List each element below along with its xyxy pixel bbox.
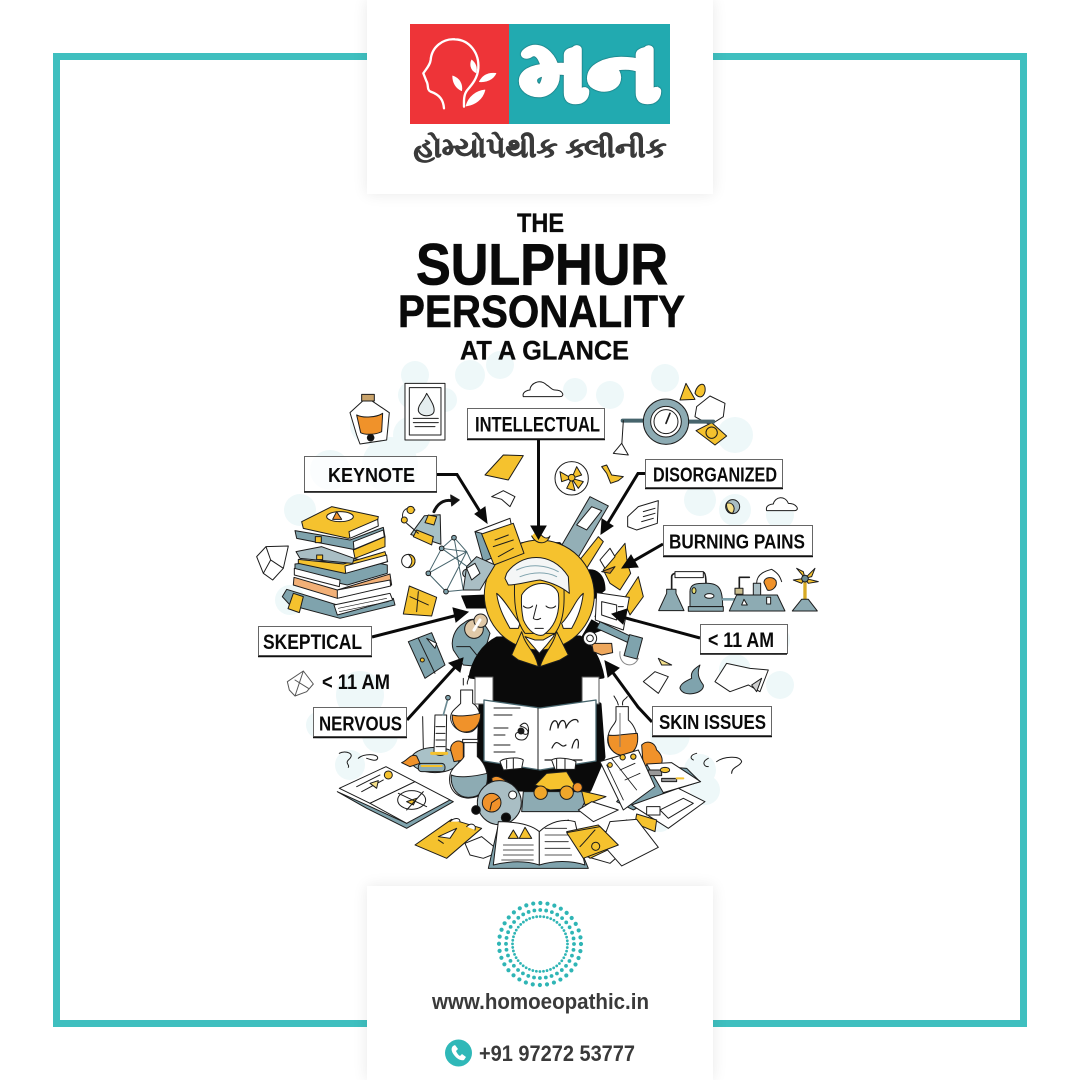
- icon: yellow chart note and sketch sheet: [567, 820, 640, 863]
- arrow: skeptical: [372, 608, 468, 637]
- icon: right wrench assembly: [583, 607, 643, 665]
- icon: yellow card: [485, 455, 523, 480]
- arrow: disorganized: [601, 474, 645, 534]
- icon: report sheet: [595, 593, 629, 630]
- label: intellectual: [467, 408, 605, 440]
- illustration: [257, 382, 818, 868]
- icon: phone: [445, 1040, 472, 1066]
- icon: flame shards: [600, 543, 643, 615]
- arrow: less than 11 am right: [612, 609, 700, 638]
- icon: dotted ring logo: [499, 903, 581, 985]
- icon: grey flask: [450, 739, 487, 798]
- label: burning pains: BURNING PAINS: [669, 532, 805, 554]
- label: skin issues: [652, 706, 772, 736]
- website: www.homoeopathic.in: [431, 989, 649, 1014]
- icon: cloud top: [523, 382, 563, 397]
- icon: yellow map note: [403, 586, 437, 616]
- icon: large open book bottom: [488, 820, 588, 868]
- icon: note paper: [628, 501, 658, 530]
- icon: beaker on stand: [402, 695, 463, 773]
- icon: crumpled paper small: [287, 671, 313, 696]
- arrow: intellectual: [531, 440, 546, 539]
- arrow: nervous: [407, 658, 463, 720]
- icon: open book with handwriting: [484, 700, 596, 770]
- icon: molecule lattice: [426, 535, 477, 594]
- label: less than 11 am left: < 11 AM: [322, 671, 390, 694]
- label: keynote: [304, 456, 437, 492]
- icon: lab equipment: [659, 568, 818, 611]
- icon: orange potion jar: [350, 394, 389, 444]
- arrow: skin issues: [605, 661, 652, 722]
- arrow: keynote: [436, 474, 487, 523]
- panel: logo backing: [367, 0, 713, 194]
- title: AT A GLANCE: [460, 336, 629, 366]
- phone number: +91 97272 53777: [479, 1041, 635, 1066]
- arrows: [372, 440, 700, 722]
- title: THE: [517, 208, 564, 238]
- label: skin issues: SKIN ISSUES: [659, 712, 766, 734]
- icon: ball: [402, 554, 415, 568]
- logo: [410, 24, 670, 163]
- label: skeptical: [258, 626, 372, 656]
- title: PERSONALITY: [398, 286, 685, 337]
- brand subtitle: હોમ્યોપેથીક ક્લીનીક: [414, 132, 666, 163]
- icon: cloud right: [766, 498, 797, 511]
- icon: head with leaves: [423, 39, 496, 108]
- label: keynote: KEYNOTE: [328, 465, 415, 487]
- icon: open book lower left: [337, 767, 453, 828]
- figure: torso: [470, 637, 604, 790]
- title: [398, 208, 685, 366]
- icon: yellow note bottom left: [415, 818, 500, 858]
- label: intellectual: INTELLECTUAL: [475, 414, 600, 436]
- icon: floating items right: [643, 658, 768, 694]
- icon: grey mechanical gear: [452, 614, 490, 667]
- background pale blue blobs: [275, 351, 794, 832]
- icon: phone device: [559, 497, 608, 568]
- icon: grey book left: [408, 633, 445, 678]
- icon: small globe ball: [726, 500, 740, 514]
- label: nervous: NERVOUS: [319, 714, 402, 736]
- icon: torn paper: [492, 491, 515, 507]
- figure: hands: [500, 758, 576, 770]
- icon: orange flask left: [451, 676, 481, 732]
- icon: yellow note on bottom sketch: [567, 827, 618, 858]
- icon: scribble left: [339, 752, 378, 767]
- figure: halo head and face: [462, 529, 607, 667]
- label: skeptical: SKEPTICAL: [263, 631, 362, 654]
- icon: yellow bone: [602, 465, 623, 483]
- panel: contact backing: [367, 886, 713, 1080]
- label: nervous: [313, 708, 407, 738]
- icon: scribble right: [691, 753, 742, 773]
- icon: fan disc: [555, 462, 588, 495]
- arrow: burning pains: [622, 544, 663, 568]
- label: disorganized: DISORGANIZED: [653, 464, 777, 486]
- icon: gauge instrument: [613, 383, 727, 455]
- contact block: [431, 903, 649, 1066]
- icon: flask and maps right: [578, 696, 705, 866]
- title: SULPHUR: [416, 232, 668, 298]
- icon: book stack: [282, 507, 395, 618]
- icon: crumpled paper left: [257, 546, 288, 580]
- brand name: મન: [520, 27, 660, 118]
- label: less than 11 am right: [700, 624, 788, 654]
- icon: framed drop card: [405, 383, 445, 440]
- icon: yellow book: [463, 518, 524, 590]
- labels: [258, 408, 813, 738]
- label: disorganized: [645, 460, 783, 488]
- icon: lamp with curved arrow: [401, 495, 459, 545]
- label: burning pains: [663, 526, 813, 556]
- label: less than 11 am right: < 11 AM: [708, 629, 774, 652]
- icon: gold chips on device: [472, 772, 606, 825]
